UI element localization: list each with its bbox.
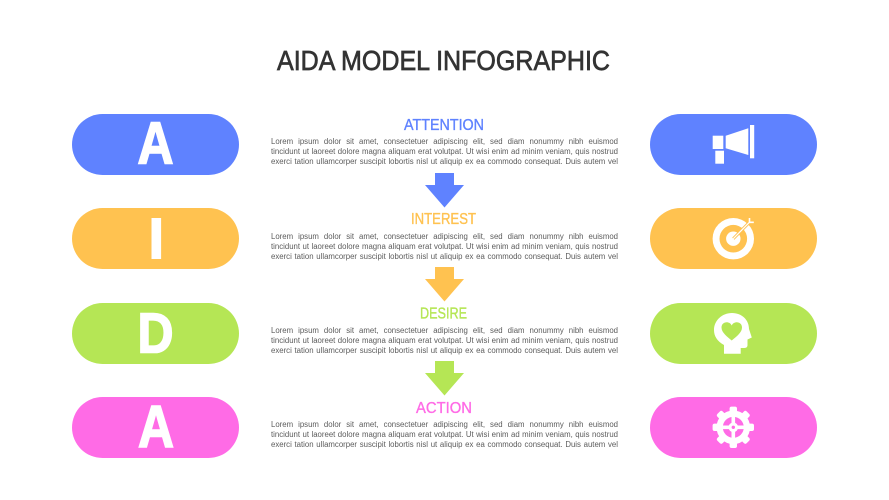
text block: interest: Lorem ipsum dolor sit amet, consectetuer adipiscing elit, sed diam nonummy nibh euismod <box>271 232 618 240</box>
arrow: attention to interest <box>425 173 464 208</box>
text block: action <box>271 420 618 449</box>
heading: action: ACTION <box>416 400 472 417</box>
title: AIDA MODEL INFOGRAPHIC <box>277 45 610 76</box>
pill: target icon <box>650 208 817 269</box>
arrow: interest to desire <box>425 267 464 302</box>
pill: D desire letter <box>72 302 239 366</box>
heading: attention: ATTENTION <box>404 117 484 134</box>
text block: attention: exerci tation ullamcorper suscipit lobortis nisl ut aliquip ex ea commodo consequat. Duis autem vel <box>271 157 618 166</box>
heading: interest: INTEREST <box>411 211 476 228</box>
text block: desire: exerci tation ullamcorper suscipit lobortis nisl ut aliquip ex ea commodo consequat. Duis autem vel <box>271 346 618 354</box>
pill: head with heart icon <box>650 303 817 364</box>
pill: A attention letter <box>72 110 239 176</box>
pill: A attention letter: A <box>138 110 174 176</box>
text block: interest: exerci tation ullamcorper suscipit lobortis nisl ut aliquip ex ea commodo consequat. Duis autem vel <box>271 252 618 260</box>
text block: interest: tincidunt ut laoreet dolore magna aliquam erat volutpat. Ut wisi enim ad minim veniam, quis nostrud <box>271 242 618 250</box>
pill: gear icon <box>650 397 817 458</box>
heading: desire: DESIRE <box>420 306 467 322</box>
text block: interest <box>271 232 618 260</box>
text block: action: exerci tation ullamcorper suscipit lobortis nisl ut aliquip ex ea commodo consequat. Duis autem vel <box>271 440 618 449</box>
arrow: desire to action <box>425 361 464 396</box>
text block: attention <box>271 137 618 166</box>
text block: desire: tincidunt ut laoreet dolore magna aliquam erat volutpat. Ut wisi enim ad minim veniam, quis nostrud <box>271 336 618 344</box>
pill: A action letter <box>72 394 239 460</box>
pill: I interest letter <box>72 208 239 269</box>
text block: desire: Lorem ipsum dolor sit amet, consectetuer adipiscing elit, sed diam nonummy nibh euismod <box>271 326 618 334</box>
pill: D desire letter: D <box>138 302 174 366</box>
pill: A action letter: A <box>138 394 174 460</box>
text block: attention: Lorem ipsum dolor sit amet, consectetuer adipiscing elit, sed diam nonummy nibh euismod <box>271 137 618 146</box>
text block: action: Lorem ipsum dolor sit amet, consectetuer adipiscing elit, sed diam nonummy nibh euismod <box>271 420 618 429</box>
text block: desire <box>271 326 618 354</box>
pill: megaphone icon <box>650 114 817 175</box>
text block: attention: tincidunt ut laoreet dolore magna aliquam erat volutpat. Ut wisi enim ad minim veniam, quis nostrud <box>271 147 618 156</box>
text block: action: tincidunt ut laoreet dolore magna aliquam erat volutpat. Ut wisi enim ad minim veniam, quis nostrud <box>271 430 618 439</box>
